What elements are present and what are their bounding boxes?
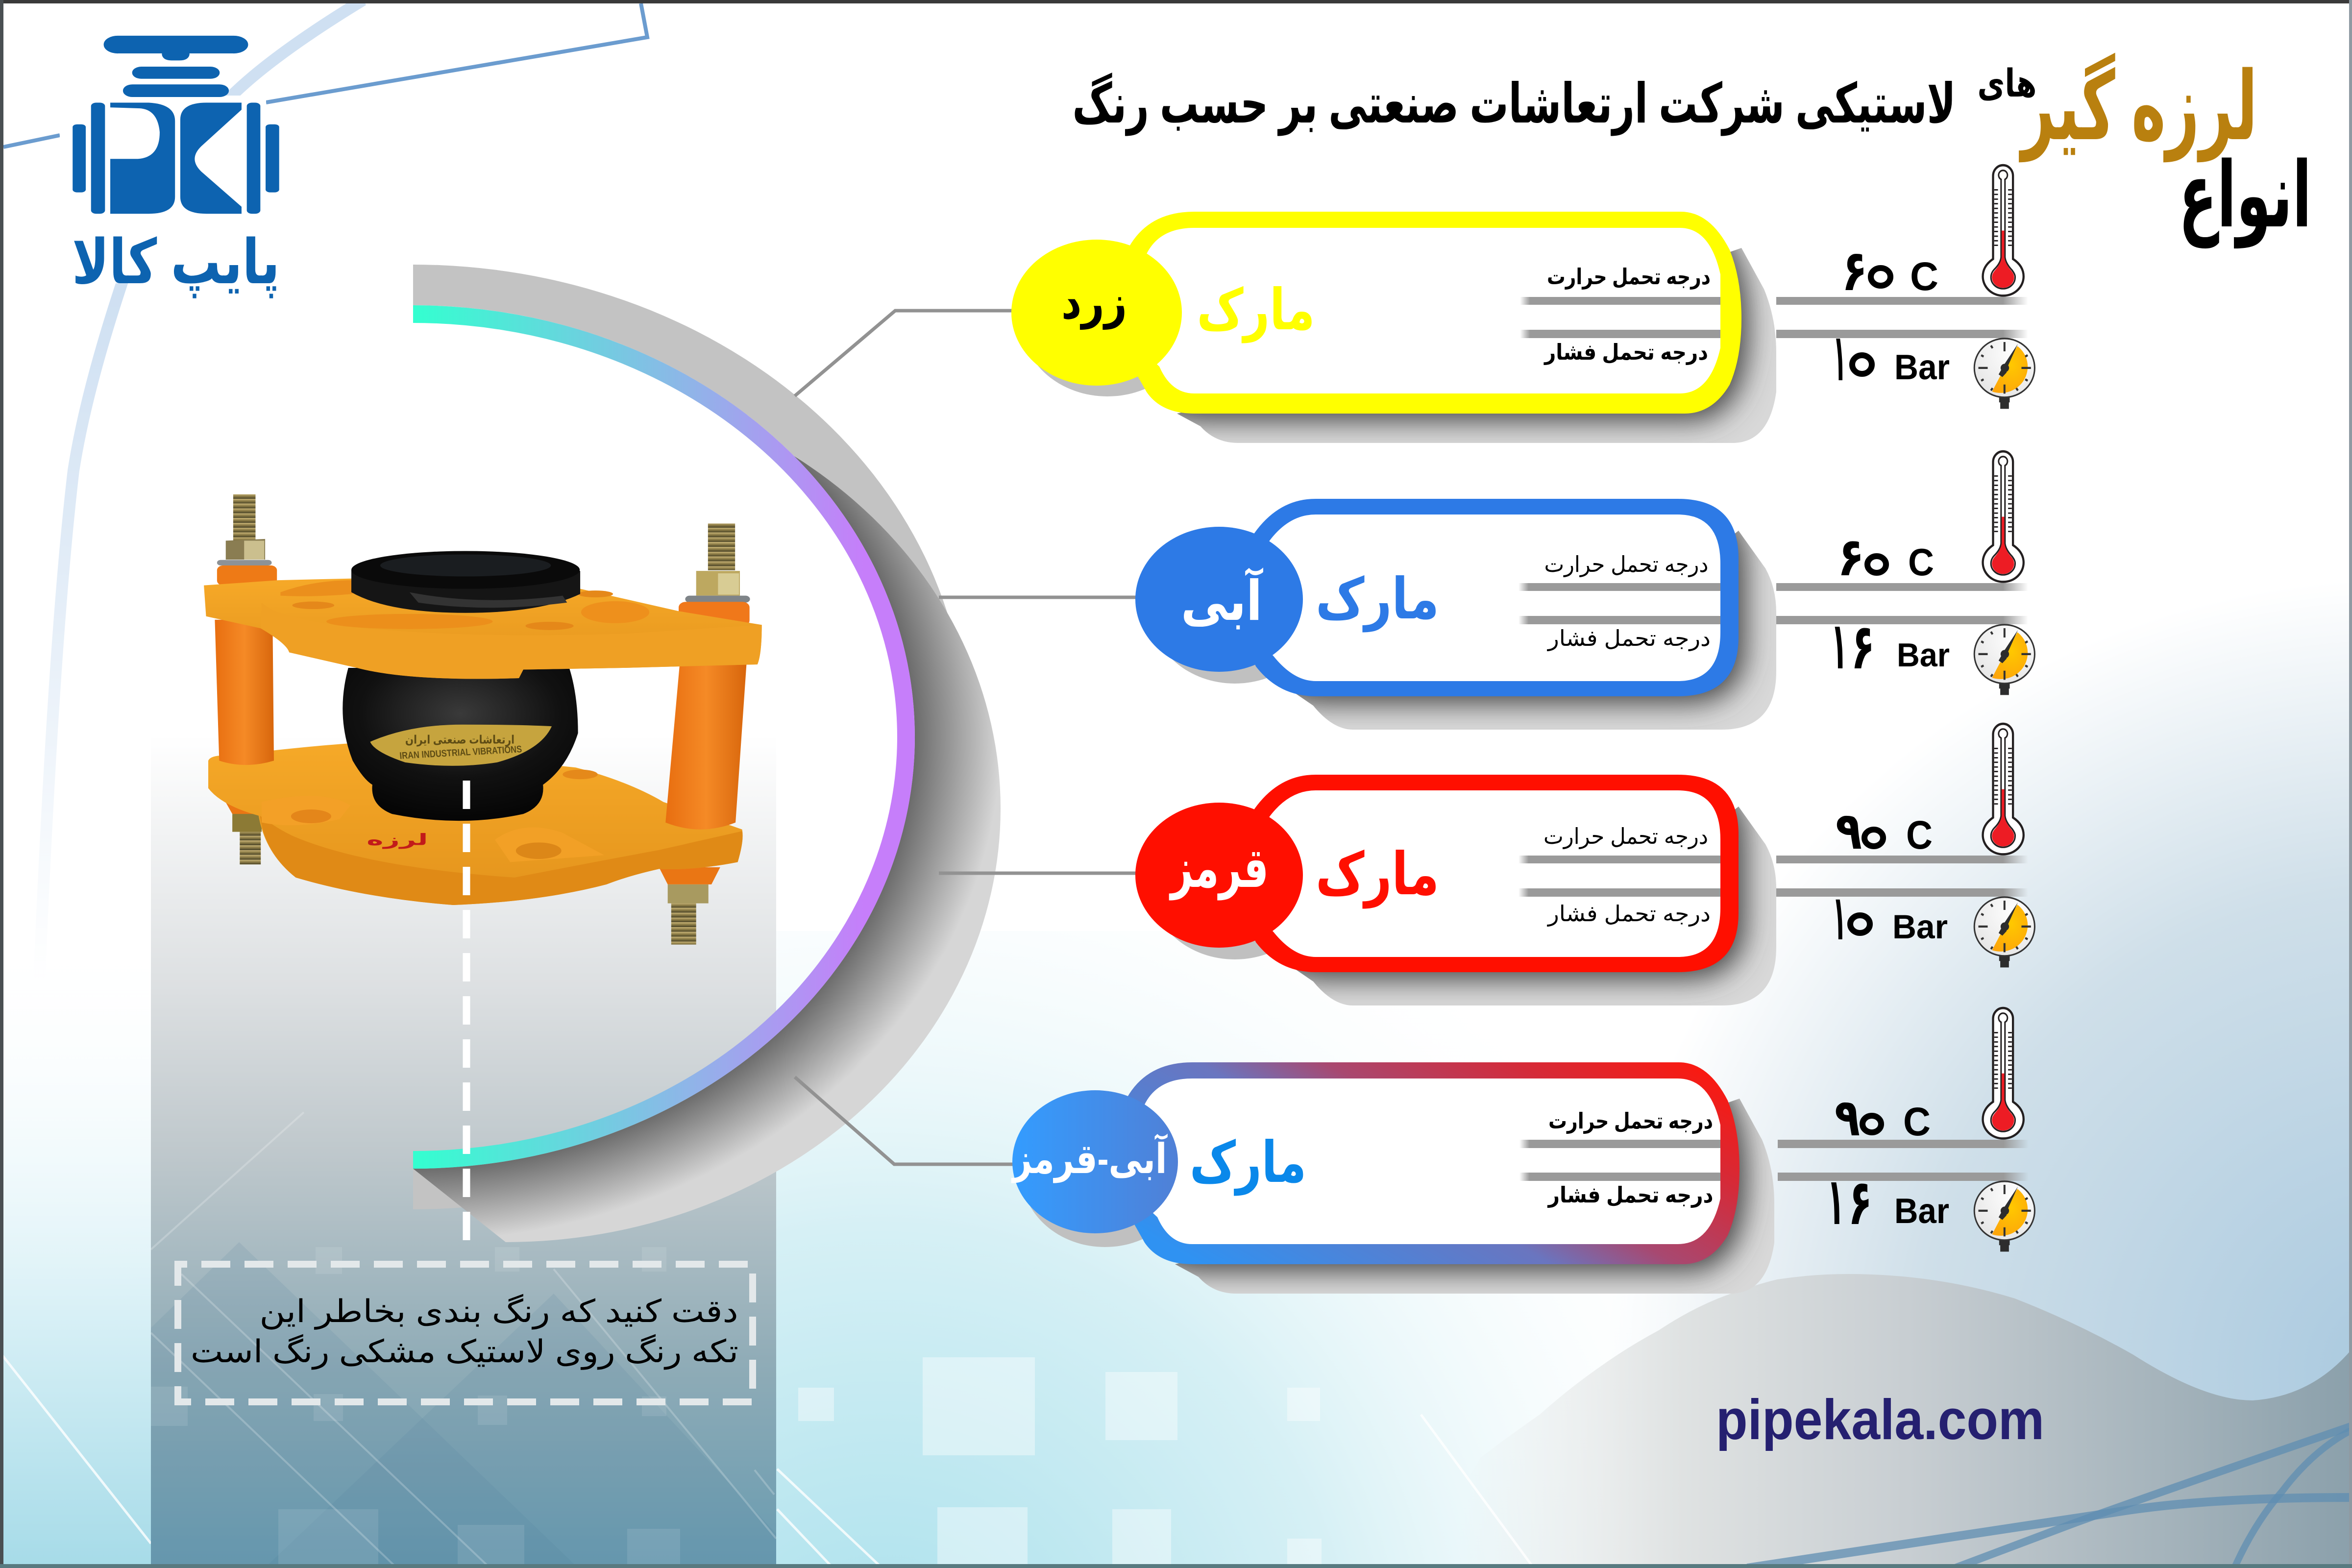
- background: curved lines bottom right: [1747, 1426, 2352, 1568]
- panel: yellow brand tag: [1011, 212, 2028, 456]
- values: row 3 pressure: ۱: [1833, 883, 1846, 953]
- tag frame: [1225, 499, 1739, 696]
- icon: gauge row 3: [1974, 897, 2034, 967]
- background: grey hill: [1421, 1274, 2352, 1568]
- chart: semi-circular hub with shadow: [413, 265, 1001, 1242]
- heat label: درجه تحمل حرارت: [1544, 824, 1708, 849]
- pressure label: درجه تحمل فشار: [1547, 1182, 1713, 1208]
- brand word: مارک: [1316, 841, 1439, 908]
- values: row 4 temperature: ۹: [1835, 1089, 1860, 1147]
- gold label: ارتعاشات صنعتی ایران: [405, 733, 514, 746]
- values: row 1 temperature: [1842, 240, 1938, 302]
- panel: left gradient column: [151, 735, 776, 1568]
- right column: [665, 661, 746, 830]
- values: row 3 temperature: C: [1906, 813, 1933, 858]
- logo mark: [73, 36, 279, 214]
- values: row 1 pressure: ۱: [1833, 321, 1846, 394]
- arrow: connector to blue-red: [795, 1077, 1019, 1164]
- circle shadow: [1022, 1101, 1188, 1247]
- tag frame: [1102, 212, 1741, 414]
- values: row 2 pressure: ۱: [1831, 610, 1847, 683]
- arrow: connector to red: [939, 871, 1147, 875]
- right top bolt: [679, 523, 750, 626]
- background: left cyan strip: [0, 931, 151, 1568]
- icon: product photo of rubber expansion joint: [204, 494, 762, 945]
- tag body: [1102, 228, 1720, 393]
- brand word: مارک: [1190, 1130, 1306, 1196]
- pressure label: درجه تحمل فشار: [1544, 340, 1708, 365]
- values: row 3 temperature: ۰: [1868, 826, 1880, 847]
- tag outer bars: [1776, 583, 2028, 624]
- values: row 1 temperature: C: [1910, 254, 1938, 299]
- brand word: مارک: [1197, 278, 1315, 343]
- tag body: [1215, 790, 1720, 957]
- badge text: زرد: [1061, 277, 1127, 330]
- values: row 1 pressure: ۰: [1856, 352, 1868, 374]
- values: row 4 temperature: [1835, 1089, 1931, 1147]
- circle shadow: [1151, 539, 1319, 684]
- values: row 2 pressure: Bar: [1897, 637, 1950, 674]
- dashed guide line: [463, 781, 470, 1245]
- left column: [215, 620, 274, 765]
- values: row 3 pressure: [1833, 883, 1948, 953]
- values: row 4 pressure: Bar: [1894, 1192, 1949, 1231]
- values: row 4 pressure: ۱: [1827, 1165, 1844, 1238]
- tag badge: [1012, 1090, 1178, 1233]
- title main: لاستیکی شرکت ارتعاشات صنعتی بر حسب رنگ: [1072, 72, 1956, 136]
- inner bars: [1520, 297, 1720, 338]
- title superscript: های: [1978, 62, 2036, 105]
- inner bars: [1519, 1140, 1720, 1181]
- badge text: آبی-قرمز: [1011, 1133, 1168, 1183]
- icon: thermometer row 3: [1983, 724, 2024, 854]
- tag frame: [1225, 775, 1739, 972]
- logo wordmark: پایپ کالا: [72, 227, 280, 298]
- panel: blue brand tag: [1135, 499, 2028, 740]
- icon: gauge row 4: [1974, 1181, 2034, 1251]
- inner bars: [1519, 856, 1720, 897]
- logo: [60, 36, 280, 298]
- values: row 4 temperature: C: [1903, 1100, 1931, 1144]
- icon: thermometer row 4: [1983, 1008, 2024, 1138]
- values: row 1 temperature: ۶: [1842, 240, 1867, 302]
- values: row 2 pressure: [1831, 610, 1950, 683]
- tag shadow: [1108, 1070, 1811, 1306]
- rubber sphere: [343, 668, 578, 821]
- note text: تکه رنگ روی لاستیک مشکی رنگ است: [191, 1334, 738, 1370]
- icon: gauge row 2: [1974, 625, 2034, 695]
- values: row 1 temperature: ۰: [1875, 265, 1886, 286]
- values: row 2 pressure: ۶: [1851, 612, 1875, 682]
- tag badge: [1135, 803, 1303, 948]
- hub: grey band: [413, 265, 948, 1209]
- tag shadow: [1177, 248, 1776, 443]
- background: bright diagonal lines: [0, 1352, 1534, 1568]
- callout: note box: [178, 1264, 753, 1402]
- values: row 1 pressure: [1833, 321, 1950, 394]
- tag badge: [1011, 240, 1182, 386]
- values: row 2 temperature: ۶: [1838, 527, 1864, 587]
- background: top-left light arc: [39, 0, 363, 980]
- tag frame: [1101, 1062, 1740, 1264]
- icon: thermometer row 2: [1983, 451, 2024, 582]
- left bottom bolt: [223, 799, 262, 864]
- arrow: connector to yellow: [795, 311, 1019, 396]
- values: row 2 temperature: [1838, 527, 1934, 587]
- tag body: [1101, 1078, 1720, 1244]
- values: row 1 pressure: Bar: [1894, 348, 1950, 387]
- hub: extruded shadow: [413, 456, 1001, 1242]
- inner bars: [1519, 583, 1720, 624]
- values: row 3 temperature: ۹: [1836, 803, 1862, 860]
- badge text: آبی: [1181, 567, 1263, 632]
- stamp on flange: لرزه: [367, 831, 428, 849]
- tag badge: [1135, 527, 1303, 672]
- tag outer bars: [1776, 856, 2028, 897]
- bottom flange: [208, 743, 743, 905]
- heat label: درجه تحمل حرارت: [1547, 264, 1711, 290]
- icon: gauge row 1: [1974, 339, 2034, 409]
- background: thin blue frame line: [3, 3, 647, 147]
- note text: [191, 1294, 738, 1370]
- values: row 4 temperature: ۰: [1866, 1112, 1878, 1133]
- website url: pipekala.com: [1716, 1388, 2044, 1451]
- panel: red brand tag: [1135, 775, 2028, 1016]
- panel: blue-red brand tag: [1011, 1062, 2029, 1306]
- circle shadow: [1022, 250, 1193, 396]
- logo background: [60, 96, 266, 283]
- brand word: مارک: [1316, 567, 1439, 632]
- hub: coloured arc: [413, 314, 906, 1160]
- pressure label: درجه تحمل فشار: [1547, 901, 1711, 927]
- background: cyan wash: [0, 931, 1862, 1568]
- top flange: [204, 579, 762, 679]
- tag outer bars: [1776, 297, 2028, 338]
- right bottom bolt: [659, 867, 720, 945]
- arrow: connector to blue: [939, 596, 1147, 599]
- pressure label: درجه تحمل فشار: [1547, 626, 1711, 651]
- heat label: درجه تحمل حرارت: [1548, 1108, 1713, 1134]
- values: row 4 pressure: ۶: [1848, 1168, 1872, 1238]
- circle shadow: [1151, 814, 1319, 959]
- heat label: درجه تحمل حرارت: [1544, 552, 1708, 577]
- values: row 3 pressure: ۰: [1854, 912, 1866, 933]
- badge text: قرمز: [1169, 837, 1269, 900]
- tag shadow: [1225, 506, 1813, 740]
- icon: thermometer row 1: [1983, 165, 2024, 295]
- left top bolt: [217, 494, 277, 586]
- note text: دقت کنید که رنگ بندی بخاطر این: [260, 1294, 738, 1330]
- rubber top ring: [351, 551, 580, 613]
- values: row 4 pressure: [1827, 1165, 1949, 1238]
- gold label: [370, 725, 552, 766]
- gold label: IRAN INDUSTRIAL VIBRATIONS: [399, 744, 522, 761]
- tag outer bars: [1778, 1140, 2029, 1181]
- values: row 2 temperature: ۰: [1871, 552, 1883, 574]
- tag body: [1215, 514, 1720, 681]
- tag shadow: [1225, 782, 1813, 1016]
- title: heading: [1072, 52, 2312, 248]
- values: row 3 temperature: [1836, 803, 1933, 860]
- background: decorative squares: [798, 1357, 1322, 1568]
- note frame: [178, 1264, 753, 1402]
- values: row 3 pressure: Bar: [1892, 908, 1948, 946]
- values: row 2 temperature: C: [1908, 540, 1934, 584]
